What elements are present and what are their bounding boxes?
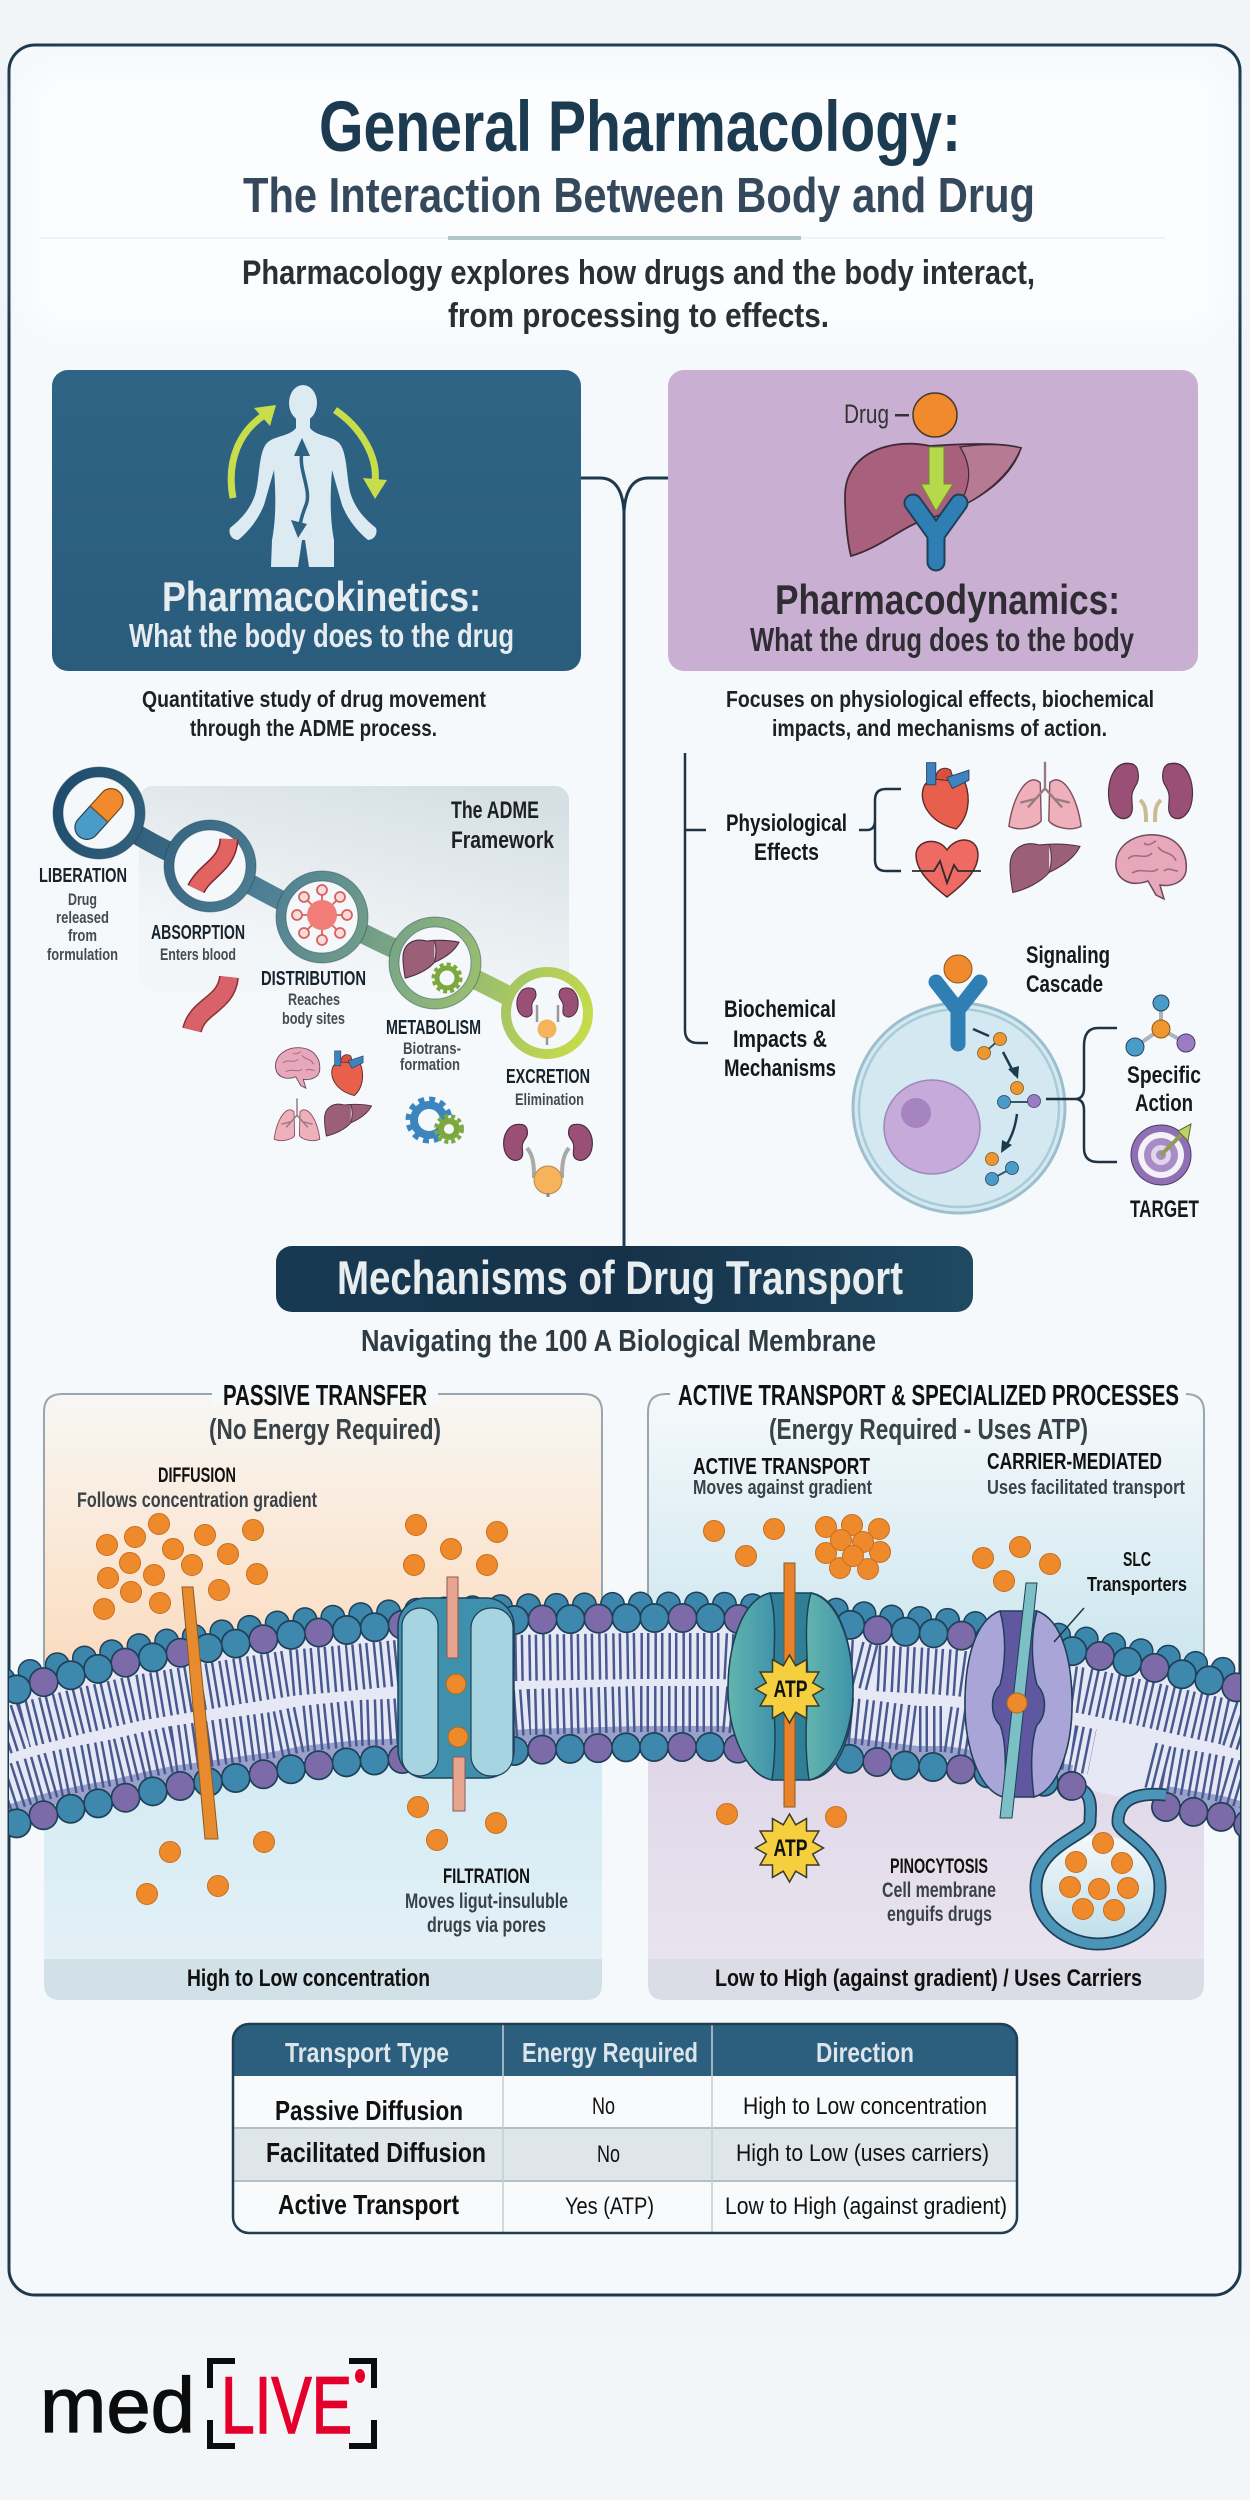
subheading: What the body does to the drug [129, 617, 514, 654]
framework title: The ADME [451, 797, 539, 824]
label: absorption: Enters blood [160, 945, 236, 964]
logo: med [40, 2361, 195, 2449]
label: distribution: Reaches [288, 990, 340, 1009]
label: SLC transporters [1054, 1549, 1187, 1642]
PK description: through the ADME process. [190, 715, 437, 741]
icon: drug, liver and receptor [844, 393, 1021, 562]
drug molecules above membrane [94, 1514, 268, 1620]
label: Physiological [726, 810, 847, 837]
drug molecules below membrane [136, 1832, 274, 1904]
PD branch: physiological effects [685, 753, 1193, 1043]
heading [209, 1380, 441, 1446]
PK description: Quantitative study of drug movement [142, 686, 486, 712]
signaling label: Cascade [1026, 971, 1103, 998]
icon: target [1131, 1124, 1191, 1185]
cell diagram [853, 955, 1065, 1213]
active transport contents [678, 1380, 1187, 1992]
connector lines [580, 478, 668, 1248]
icon: vessel segment [192, 977, 229, 1030]
label: excretion: EXCRETION [506, 1066, 590, 1088]
table row: facilitated diffusion: No [597, 2141, 620, 2168]
label: Biochemical [724, 996, 836, 1023]
logo: LIVE [221, 2361, 352, 2451]
label: active transport [693, 1453, 872, 1499]
channel protein [398, 1577, 514, 1811]
label: specific action: Action [1135, 1090, 1193, 1117]
heading: Pharmacokinetics: [162, 573, 481, 620]
table row: passive diffusion: Passive Diffusion [275, 2095, 463, 2126]
label: pinocytosis: PINOCYTOSIS [890, 1855, 988, 1878]
label: pinocytosis: enguifs drugs [887, 1903, 992, 1926]
subtitle: The Interaction Between Body and Drug [243, 169, 1035, 223]
signaling label [1026, 942, 1110, 998]
PD description [726, 686, 1154, 741]
label [726, 810, 847, 866]
framework title: Framework [451, 827, 555, 854]
icon: liver with gear [403, 940, 460, 992]
label: liberation: formulation [47, 945, 118, 964]
table row: facilitated diffusion: Facilitated Diffusion [266, 2137, 486, 2168]
footer: active direction: Low to High (against gradient) / Uses Carriers [715, 1965, 1142, 1992]
label: pinocytosis: Cell membrane [882, 1879, 996, 1902]
passive transfer contents [77, 1380, 568, 1992]
label: liberation: from [68, 926, 97, 945]
label: distribution: DISTRIBUTION [261, 968, 366, 990]
icon: lungs [1009, 762, 1081, 829]
panel: pharmacokinetics [52, 370, 581, 671]
label: carrier-mediated [987, 1448, 1185, 1499]
PD description: Focuses on physiological effects, biochemical [726, 686, 1154, 712]
label: liberation: Drug [68, 890, 97, 909]
PD description: impacts, and mechanisms of action. [772, 715, 1107, 741]
heading: Pharmacodynamics: [775, 576, 1120, 623]
table row: passive diffusion [275, 2093, 987, 2126]
icon: heart [922, 763, 969, 829]
panel: passive transfer background [44, 1385, 602, 2000]
table header: Energy Required [522, 2037, 698, 2068]
icon: kidneys [1108, 763, 1193, 822]
label: active transport: Moves against gradient [693, 1477, 872, 1499]
label: Effects [754, 839, 819, 866]
label: filtration [405, 1865, 568, 1937]
label: metabolism: formation [400, 1055, 460, 1074]
ATP burst: released [756, 1814, 824, 1882]
icon: kidneys and bladder [504, 1124, 592, 1197]
heading: PASSIVE TRANSFER [223, 1380, 427, 1412]
lipid bilayer membrane [0, 1604, 1250, 1832]
table header: Direction [816, 2037, 914, 2068]
table row: facilitated diffusion: High to Low (uses carriers) [736, 2140, 989, 2167]
subheading: What the drug does to the body [750, 621, 1135, 658]
label: liberation [39, 865, 127, 964]
label: specific action: Specific [1127, 1062, 1201, 1089]
intro text: Pharmacology explores how drugs and the body interact, [242, 254, 1035, 292]
title: General Pharmacology: [319, 88, 961, 167]
label: Mechanisms [724, 1055, 836, 1082]
label: diffusion: Follows concentration gradient [77, 1489, 317, 1512]
icon: capsule [70, 784, 128, 844]
icon: distribution network [292, 885, 352, 945]
icon: gears [408, 1099, 462, 1142]
label: active transport: ACTIVE TRANSPORT [693, 1453, 870, 1479]
chain of rings [53, 767, 588, 1054]
table row: facilitated diffusion [266, 2137, 989, 2168]
filtration molecules [404, 1514, 508, 1850]
pinocytosis vesicle [1036, 1772, 1166, 1944]
framework title [451, 797, 555, 854]
label: filtration: Moves ligut-insuluble [405, 1890, 568, 1913]
ATP burst: pump [756, 1655, 824, 1723]
SLC carrier protein [965, 1583, 1072, 1818]
icon: body with arrows [229, 385, 387, 567]
label: SLC transporters: Transporters [1087, 1574, 1187, 1596]
heading [678, 1380, 1179, 1446]
label: SLC transporters: SLC [1123, 1549, 1151, 1571]
label: target: TARGET [1130, 1196, 1199, 1223]
icon: molecule [1126, 995, 1195, 1056]
footer: passive direction: High to Low concentration [187, 1965, 430, 1992]
icon: brain [1116, 835, 1186, 899]
label: distribution [261, 968, 366, 1028]
PD branch: biochemical impacts [724, 942, 1201, 1223]
icon: heart with pulse [912, 840, 981, 897]
label: pinocytosis [882, 1855, 996, 1926]
label: metabolism [386, 1017, 481, 1074]
carrier molecules [972, 1536, 1060, 1592]
PK description [142, 686, 486, 741]
ATP burst: released: ATP [774, 1835, 808, 1862]
comparison table [233, 2024, 1017, 2233]
label: Impacts & [733, 1026, 827, 1053]
table row: active transport: Yes (ATP) [565, 2193, 654, 2220]
label: specific action [1127, 1062, 1201, 1117]
table row: passive diffusion: No [592, 2093, 615, 2120]
panel: pharmacodynamics [668, 370, 1198, 671]
ATP burst: pump: ATP [774, 1676, 808, 1703]
panel: active transport background [648, 1385, 1204, 2000]
label: distribution: body sites [282, 1009, 345, 1028]
icons: target organs [274, 1048, 372, 1141]
label: filtration: FILTRATION [443, 1865, 530, 1888]
label: carrier-mediated: Uses facilitated transport [987, 1477, 1185, 1499]
label: absorption: ABSORPTION [151, 922, 245, 944]
icon: liver [1010, 844, 1080, 892]
table row: active transport: Active Transport [278, 2189, 459, 2220]
label: diffusion: DIFFUSION [158, 1464, 236, 1487]
label: liberation: LIBERATION [39, 865, 127, 887]
signaling label: Signaling [1026, 942, 1110, 969]
table header [285, 2037, 914, 2068]
label: absorption [151, 922, 245, 964]
table row: passive diffusion: High to Low concentration [743, 2093, 987, 2120]
drug molecules: active side [704, 1514, 890, 1828]
section heading bar: Mechanisms of Drug Transport [337, 1251, 903, 1304]
intro text [242, 254, 1035, 335]
label: metabolism: Biotrans- [403, 1039, 461, 1058]
label: excretion [506, 1066, 590, 1109]
table row: active transport: Low to High (against gradient) [725, 2193, 1007, 2220]
table row: active transport [278, 2189, 1007, 2220]
label [724, 996, 836, 1082]
label: metabolism: METABOLISM [386, 1017, 481, 1039]
label: diffusion [77, 1464, 317, 1512]
panel: ADME framework [39, 767, 592, 1197]
section subheading: Navigating the 100 A Biological Membrane [361, 1323, 876, 1358]
icon: blood vessel [196, 839, 229, 889]
table header: Transport Type [285, 2037, 449, 2068]
heading: (No Energy Required) [209, 1414, 441, 1446]
section heading bar [276, 1246, 973, 1312]
icon: drug, liver and receptor: Drug [844, 399, 889, 429]
diffusion rod [182, 1587, 218, 1839]
intro text: from processing to effects. [448, 297, 829, 335]
heading: (Energy Required - Uses ATP) [769, 1414, 1088, 1446]
icon: urinary system [517, 988, 578, 1045]
label: excretion: Elimination [515, 1090, 584, 1109]
logo [40, 2361, 374, 2451]
label: filtration: drugs via pores [427, 1914, 546, 1937]
label: carrier-mediated: CARRIER-MEDIATED [987, 1448, 1162, 1474]
label: liberation: released [56, 908, 109, 927]
title block [243, 88, 1035, 223]
ATP pump protein [728, 1563, 853, 1807]
